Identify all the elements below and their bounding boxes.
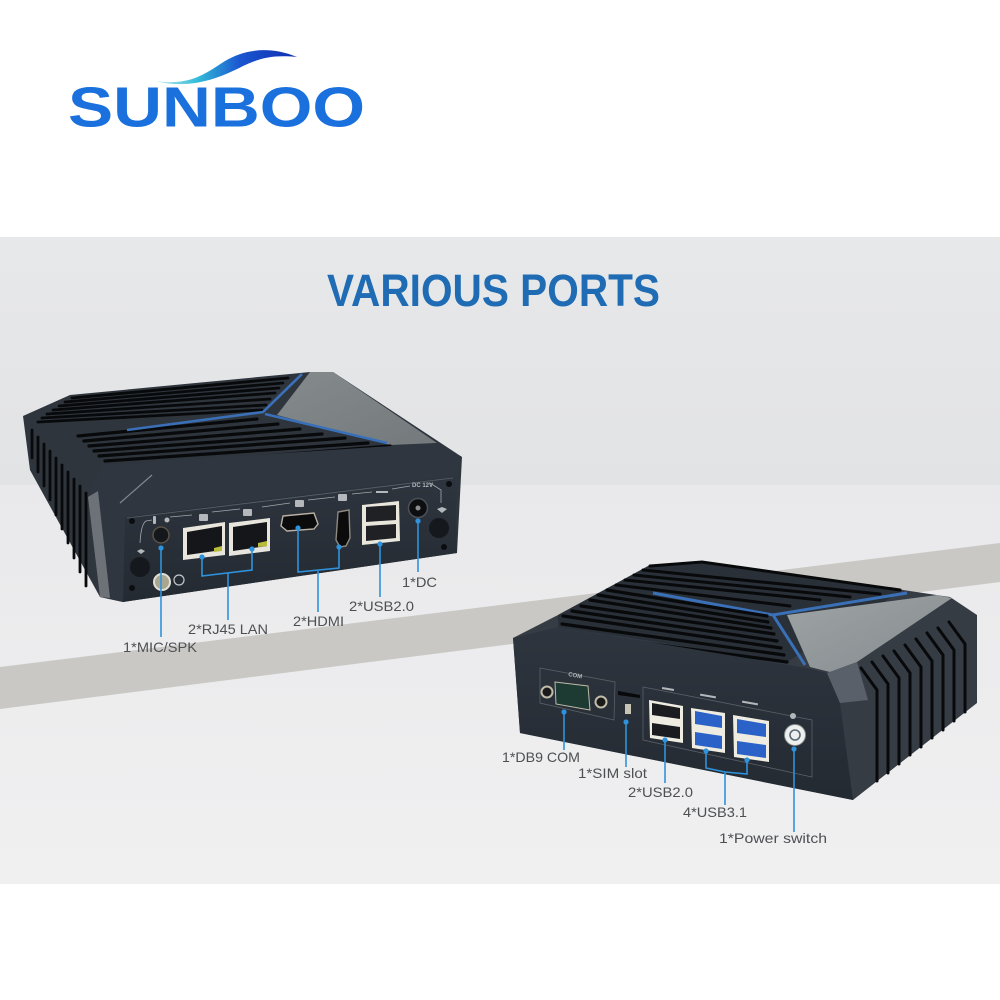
- top surface: [558, 561, 903, 662]
- HDMI port 1: [281, 513, 318, 531]
- USB3.1 stacked port A: [691, 708, 725, 753]
- DC jack: [408, 498, 428, 518]
- grey wedge: [277, 372, 437, 445]
- screws: [129, 481, 452, 591]
- labels front: [502, 749, 827, 846]
- USB3.1 stacked port B: [733, 715, 769, 762]
- logo wordmark: SUNBOO: [68, 76, 365, 140]
- device: rear view mini PC: [23, 372, 462, 637]
- labels rear: [123, 574, 437, 655]
- COM legend text: COM: [568, 672, 582, 680]
- device: front view mini PC: [513, 561, 977, 832]
- callout dots rear: [158, 518, 421, 560]
- mic jack: [153, 527, 169, 543]
- front face: [513, 627, 853, 800]
- top fins back group: [616, 562, 900, 606]
- DC legend text: DC 12V: [412, 483, 433, 489]
- logo: Sunboo: [68, 50, 365, 140]
- port legend line: [140, 483, 441, 543]
- label DC: 1*DC: [402, 574, 437, 590]
- label USB3.1: 4*USB3.1: [683, 804, 747, 820]
- chassis body: [513, 561, 977, 800]
- power button: [784, 724, 806, 746]
- SIM icon: [625, 704, 631, 714]
- callout lines front: [564, 712, 794, 832]
- label HDMI: 2*HDMI: [293, 613, 344, 629]
- title: VARIOUS PORTS: [327, 265, 660, 316]
- top fins front group: [78, 419, 390, 468]
- DB9 COM port: [542, 682, 606, 710]
- front bevel: [88, 443, 462, 602]
- blue accent: [653, 593, 907, 665]
- RJ45 port 2: [229, 518, 270, 556]
- label USB2.0: 2*USB2.0: [349, 598, 414, 614]
- background panel: [0, 237, 1000, 884]
- label RJ45: 2*RJ45 LAN: [188, 621, 268, 637]
- label USB2.0: 2*USB2.0: [628, 784, 693, 800]
- label DB9: 1*DB9 COM: [502, 749, 580, 765]
- side fins: [32, 430, 86, 586]
- callout lines rear: [161, 521, 418, 637]
- label Power: 1*Power switch: [719, 830, 827, 846]
- side fins: [861, 622, 965, 781]
- label MIC: 1*MIC/SPK: [123, 639, 198, 655]
- blue Y accent: [127, 374, 387, 443]
- front panel: [123, 475, 457, 602]
- label SIM: 1*SIM slot: [578, 765, 647, 781]
- rubber plugs: [130, 557, 150, 577]
- logo wave: [155, 50, 297, 84]
- corner bevel: [827, 662, 868, 703]
- chassis body: [23, 372, 462, 602]
- RJ45 port 1: [183, 522, 225, 560]
- port legend icons: [137, 491, 447, 554]
- callout dots front: [561, 709, 797, 763]
- port frames: [540, 668, 812, 777]
- top fins front group: [562, 590, 787, 662]
- USB2.0 stacked port: [362, 501, 400, 545]
- grey wedge: [787, 595, 952, 672]
- front legend icons: [662, 687, 796, 719]
- SIM slot: [618, 691, 640, 698]
- ground screw: [154, 574, 170, 590]
- USB2.0 stacked port: [649, 700, 683, 743]
- top fins back group: [38, 378, 288, 422]
- side strip: [88, 491, 110, 598]
- HDMI port 2: [336, 510, 350, 547]
